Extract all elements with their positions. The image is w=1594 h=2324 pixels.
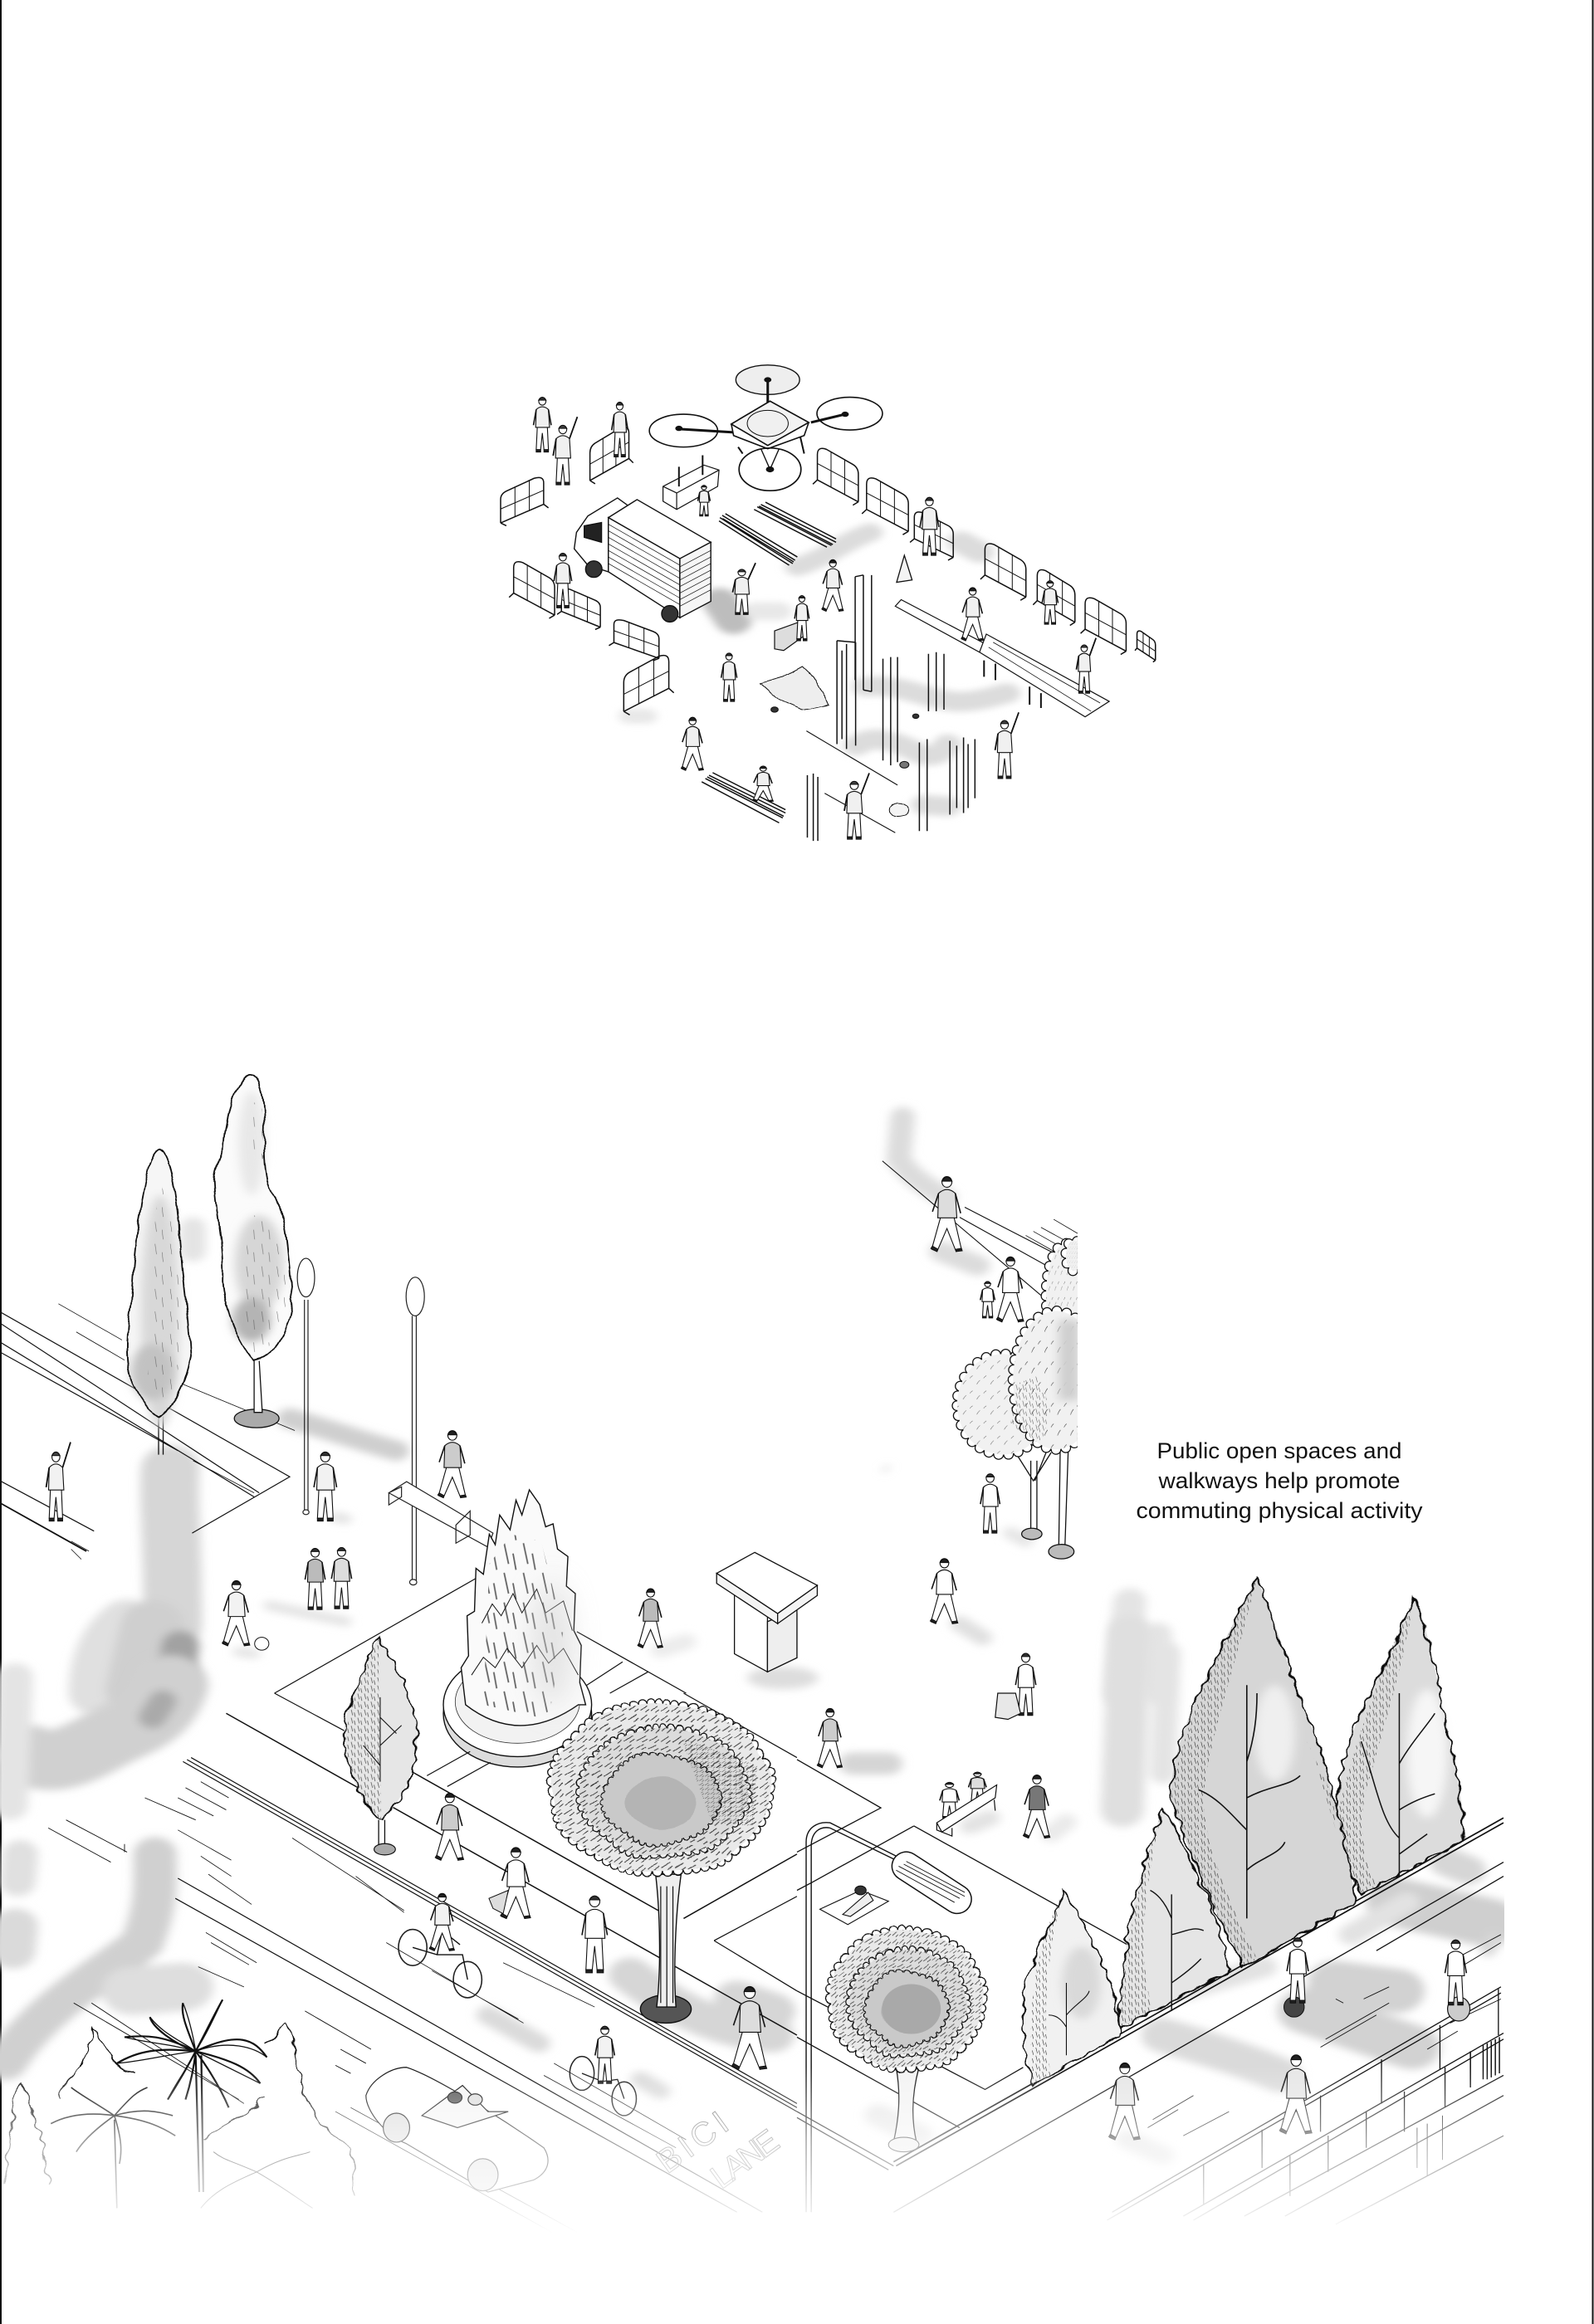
big round canopy tree <box>551 1703 770 2023</box>
shadow washes <box>5 1677 773 2092</box>
lower-right plaza: street lamp, round tree, cone trees, elevated walkway <box>797 1578 1504 2224</box>
pedestrians <box>435 1793 767 2069</box>
ground shadows <box>628 532 1007 807</box>
cone tree right (tall) <box>1336 1597 1463 1894</box>
pedestrians and riders <box>817 1653 1470 2140</box>
traffic cone <box>897 555 912 583</box>
right edge mask for walkway <box>1504 1809 1591 2324</box>
bench with seated couple <box>936 1772 997 1836</box>
poplar tree 2 <box>214 1074 292 1428</box>
small cypress <box>345 1637 417 1855</box>
caption: walkways help promote <box>1157 1468 1400 1493</box>
poplar tree 1 <box>127 1149 191 1455</box>
fences <box>501 427 1156 715</box>
cone tree lower <box>1119 1808 1229 2029</box>
crate with worker <box>663 456 719 516</box>
upper-right walkway, trees, pedestrians <box>883 1116 1158 1693</box>
person on towel <box>820 1886 888 1925</box>
plaza lines and kerbs <box>797 1760 1504 2224</box>
fountain sculpture with basin <box>443 1490 592 1767</box>
upper-left plaza: road, poplars, lamps, pedestrians <box>0 1074 819 1693</box>
walkway lines <box>883 1161 1078 1301</box>
road edge lines <box>0 1304 686 1693</box>
washes <box>853 1633 1494 2156</box>
caption: commuting physical activity <box>1136 1498 1423 1523</box>
cyclist two <box>570 2026 636 2116</box>
walkway shadows <box>883 1116 1158 1693</box>
convertible car <box>366 2068 548 2192</box>
road marking: BICI LANE <box>650 2105 786 2196</box>
lamp posts <box>297 1258 424 1585</box>
pedestrians <box>46 1431 663 1650</box>
truck <box>575 498 711 622</box>
cyclist one <box>398 1893 482 1998</box>
palms and shrubs <box>5 1999 356 2208</box>
road marking: BICI LANE: LANE <box>704 2122 786 2196</box>
cone tree centre (tallest) <box>1171 1578 1356 1967</box>
caption <box>1136 1438 1423 1523</box>
drone <box>649 365 883 491</box>
bench <box>389 1482 493 1547</box>
long steel beam <box>895 599 1109 717</box>
kiosk <box>716 1552 819 1689</box>
road marking: BICI LANE: BICI <box>650 2105 736 2180</box>
pedestrians on the walkway <box>931 1177 1024 1623</box>
tree shadow washes <box>96 1228 686 1693</box>
clustered street trees <box>957 1240 1099 1559</box>
street lamp <box>806 1823 965 2212</box>
vertical steel columns <box>806 575 975 841</box>
illustration: construction site with drone <box>501 365 1156 841</box>
workers <box>534 398 1096 839</box>
caption: Public open spaces and <box>1157 1438 1401 1463</box>
wheelbarrow <box>775 622 806 651</box>
round tree with trunk <box>830 1930 982 2152</box>
bottom fade to white <box>2 2067 1592 2233</box>
street lines <box>48 1693 797 2236</box>
cone tree front <box>1023 1891 1120 2086</box>
lower-left street: bike lanes, round tree, cyclists, car, palms <box>5 1637 797 2236</box>
rubble pile <box>761 667 919 816</box>
pipe bundles <box>702 502 836 823</box>
bottom blank <box>2 2233 1592 2324</box>
